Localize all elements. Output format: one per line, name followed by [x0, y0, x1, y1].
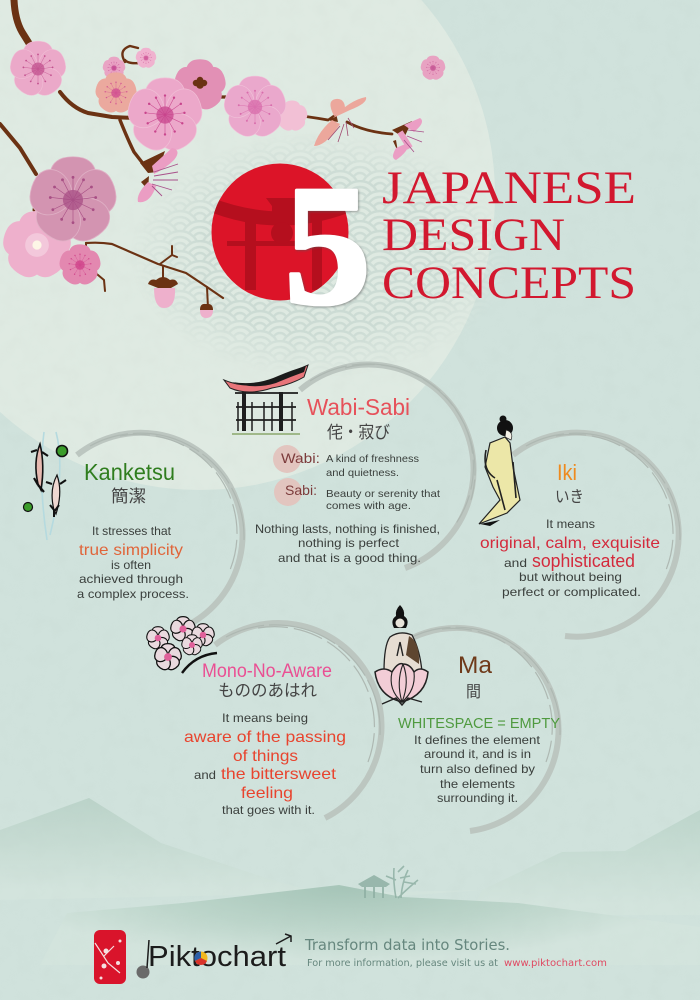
icon: distant pavilion and bamboo	[358, 866, 418, 898]
blossom 7 faded	[275, 101, 309, 133]
blossom 6 large	[124, 78, 206, 157]
Sabi definition: comes with age.	[326, 500, 411, 512]
more information line: www.piktochart.com	[504, 958, 607, 969]
bud 1	[154, 288, 175, 308]
description: the bittersweet	[221, 766, 337, 783]
description	[77, 524, 189, 601]
icon: geisha	[479, 416, 520, 526]
bottom mountains	[0, 798, 700, 965]
icon: ink cherry blossoms	[145, 617, 217, 673]
description: aware of the passing	[184, 729, 346, 746]
blossom 5 dark	[171, 59, 229, 114]
kanji: 間	[466, 684, 481, 701]
description: It means	[546, 517, 595, 531]
description: a complex process.	[77, 587, 189, 601]
icon: koi fish	[24, 432, 68, 540]
blossom 10 side	[393, 118, 424, 160]
ink circle	[77, 433, 244, 624]
heading: Mono-No-Aware	[202, 661, 332, 682]
blossom 1	[7, 41, 69, 100]
ink circle	[300, 364, 475, 568]
Sabi definition	[274, 478, 440, 512]
description: original, calm, exquisite	[480, 535, 660, 552]
description: true simplicity	[79, 542, 183, 559]
Wabi definition: Wabi:	[281, 450, 320, 466]
heading: Iki	[557, 460, 577, 485]
description: but without being	[519, 570, 622, 584]
description: achieved through	[79, 572, 183, 586]
sepals	[140, 109, 412, 310]
blossom 15	[57, 244, 103, 288]
panel: Iki	[479, 416, 680, 637]
description: nothing is perfect	[298, 536, 400, 550]
blossom 11 lone	[419, 56, 447, 82]
icon: red blossom card	[94, 930, 126, 984]
panel: Kanketsu	[24, 432, 244, 624]
heading: Ma	[458, 652, 493, 679]
title group	[212, 164, 634, 309]
callout: WHITESPACE = EMPTY	[398, 715, 560, 732]
description	[255, 522, 440, 565]
more information line: For more information, please visit us at	[307, 958, 498, 969]
panel: Ma	[375, 605, 560, 831]
Wabi definition: and quietness.	[326, 467, 399, 479]
description: turn also defined by	[420, 762, 535, 776]
seigaiha wave pattern	[160, 152, 480, 358]
panel: Mono-No-Aware	[145, 617, 382, 818]
description: and	[194, 768, 216, 782]
blossom 3	[135, 48, 157, 70]
description: It means being	[222, 711, 308, 725]
kanji: 侘・寂び	[327, 423, 390, 442]
blossom 8	[221, 76, 289, 142]
cherry blossom branches	[0, 0, 447, 318]
blossom 12 side	[138, 148, 178, 202]
description	[480, 517, 660, 599]
number 5: 5	[284, 151, 371, 341]
background moon	[0, 0, 495, 490]
blossom 13 light	[0, 211, 75, 283]
branches	[0, 0, 392, 308]
description	[184, 711, 346, 817]
title: Japanese Design Concepts: JAPANESE	[382, 162, 636, 214]
more information line	[307, 958, 607, 969]
description: It stresses that	[92, 524, 172, 538]
heading: Kanketsu	[84, 459, 175, 485]
description: is often	[111, 558, 151, 572]
blossom 14 mauve large	[25, 157, 121, 248]
Sabi definition: Beauty or serenity that	[326, 488, 440, 500]
description: of things	[233, 748, 298, 765]
description: and	[504, 556, 527, 570]
Piktochart logo: Piktochart	[148, 941, 286, 973]
icon: Buddha on lotus	[375, 605, 428, 705]
blossom 4 salmon	[93, 72, 139, 116]
description: and that is a good thing.	[278, 551, 421, 565]
hiragana: もののあはれ	[218, 681, 318, 700]
heading: Wabi-Sabi	[307, 394, 410, 420]
tagline: Transform data into Stories.	[304, 936, 510, 954]
description: sophisticated	[532, 551, 635, 571]
ink circle	[513, 433, 680, 637]
bud 2	[200, 310, 213, 318]
description: around it, and is in	[424, 747, 531, 761]
Piktochart logo	[136, 934, 291, 978]
title: Japanese Design Concepts: CONCEPTS	[382, 257, 636, 309]
Sabi definition: Sabi:	[285, 482, 317, 498]
description: that goes with it.	[222, 803, 315, 817]
description: Nothing lasts, nothing is finished,	[255, 522, 440, 536]
title: Japanese Design Concepts	[382, 162, 636, 309]
description: perfect or complicated.	[502, 585, 641, 599]
description: It defines the element	[414, 733, 541, 747]
hiragana: いき	[555, 488, 584, 506]
icon: torii gate	[224, 365, 308, 434]
description: feeling	[241, 785, 293, 802]
blossom 2	[101, 57, 127, 81]
ink circle	[400, 627, 560, 831]
red sun with torii	[212, 164, 348, 300]
description: surrounding it.	[437, 791, 518, 805]
blossom 9 side salmon	[314, 97, 366, 146]
ink circle	[215, 623, 382, 818]
Wabi definition: A kind of freshness	[326, 453, 419, 465]
panel: Wabi-Sabi	[224, 364, 475, 568]
description	[414, 733, 541, 805]
kanji: 簡潔	[111, 487, 146, 506]
title: Japanese Design Concepts: DESIGN	[382, 209, 565, 261]
footer	[94, 930, 607, 984]
Wabi definition	[273, 445, 419, 479]
description: the elements	[440, 777, 515, 791]
